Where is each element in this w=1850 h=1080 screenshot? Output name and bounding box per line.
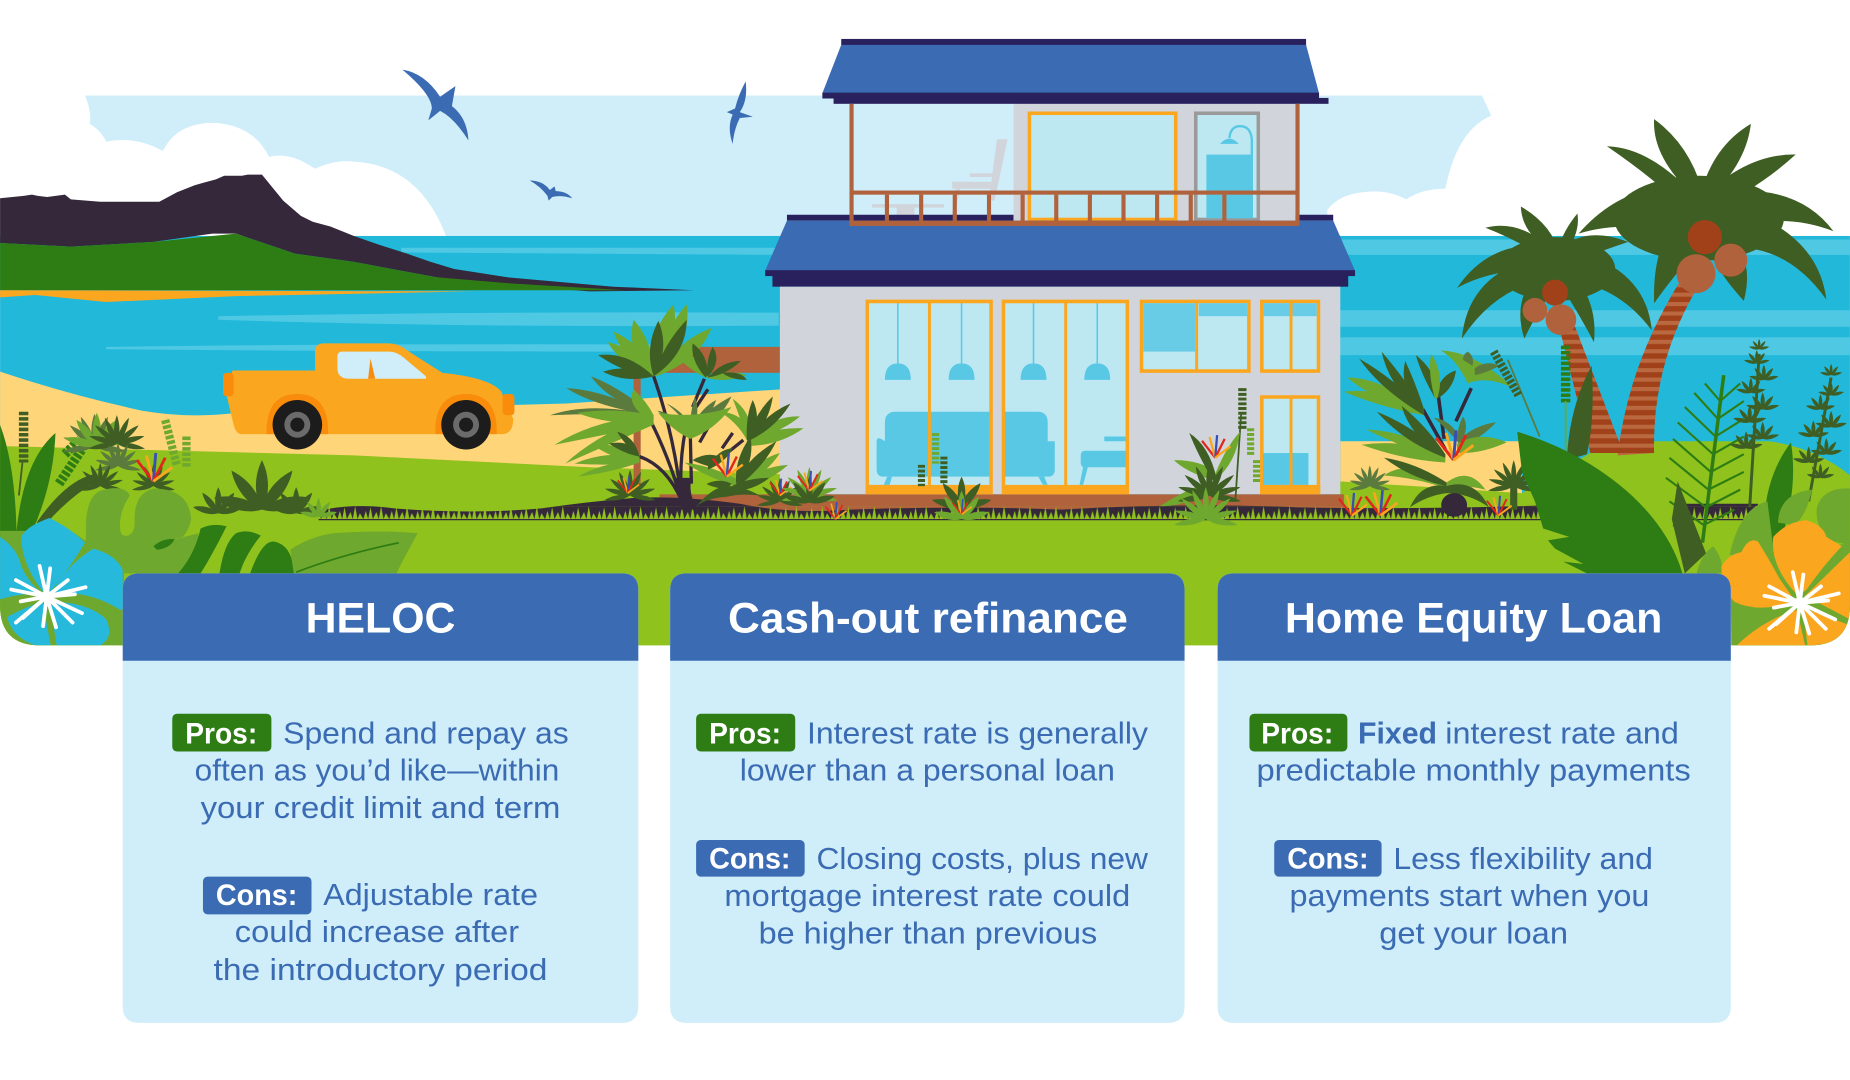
stems bbox=[1423, 388, 1471, 450]
clouds right bbox=[1327, 96, 1495, 236]
cons: Less flexibility and bbox=[1393, 842, 1653, 876]
lower left fan bbox=[1362, 429, 1445, 462]
right large fan bbox=[720, 399, 803, 446]
cons: Cons: bbox=[216, 879, 297, 912]
cons: get your loan bbox=[1379, 916, 1568, 950]
cons: Adjustable rate bbox=[323, 878, 538, 912]
stems bbox=[639, 376, 743, 505]
card: Cash-out refinance bbox=[670, 573, 1185, 1023]
beach scene illustration bbox=[0, 39, 1850, 649]
pros bbox=[172, 714, 569, 825]
balcony railing bbox=[849, 104, 1300, 226]
pros: Pros: bbox=[185, 717, 257, 750]
cons: Closing costs, plus new bbox=[816, 842, 1149, 876]
pros: your credit limit and term bbox=[201, 791, 560, 825]
card header bbox=[123, 573, 638, 661]
pros: predictable monthly payments bbox=[1257, 753, 1691, 787]
spike plants bbox=[1672, 339, 1847, 573]
ground floor wall bbox=[780, 287, 1340, 494]
pros: Interest rate is generally bbox=[807, 716, 1149, 750]
cons: be higher than previous bbox=[759, 916, 1097, 950]
striped leaf bbox=[178, 525, 294, 573]
monstera leaf bbox=[85, 488, 199, 573]
upper left fan bbox=[1344, 378, 1424, 415]
balcony chair and table bbox=[872, 139, 1008, 215]
right fan bbox=[683, 356, 747, 380]
right shrubs bbox=[1339, 346, 1566, 517]
card title: Cash-out refinance bbox=[728, 594, 1128, 641]
cons: Cons: bbox=[709, 842, 791, 875]
upper floor bbox=[1013, 104, 1297, 223]
sliding doors bbox=[866, 300, 1129, 494]
shower bbox=[1206, 126, 1253, 218]
pendant lamps bbox=[885, 301, 1110, 380]
sofa and chair bbox=[877, 412, 1128, 485]
card header bbox=[670, 573, 1185, 661]
foundation bbox=[780, 494, 1344, 511]
side windows bbox=[1141, 301, 1320, 494]
cons: payments start when you bbox=[1290, 879, 1649, 913]
shower door bbox=[1196, 113, 1258, 219]
card: Home Equity Loan bbox=[1218, 573, 1731, 1023]
birds bbox=[402, 70, 753, 201]
pros: Pros: bbox=[1261, 717, 1333, 750]
lower left fan bbox=[575, 444, 639, 477]
cons: the introductory period bbox=[214, 953, 547, 987]
house bbox=[765, 39, 1355, 511]
upper window bbox=[1029, 113, 1176, 219]
cons: mortgage interest rate could bbox=[724, 879, 1130, 913]
plants in front of house bbox=[921, 388, 1257, 528]
pros: often as you’d like—within bbox=[195, 753, 559, 787]
central plant bbox=[550, 304, 847, 519]
cons bbox=[203, 877, 547, 987]
fern right bbox=[1666, 375, 1744, 543]
sky bbox=[85, 96, 1495, 243]
pros: Spend and repay as bbox=[283, 716, 569, 750]
pros: Pros: bbox=[709, 717, 781, 750]
flower: orange hibiscus bbox=[1721, 442, 1850, 645]
top roof bbox=[822, 39, 1328, 104]
lower right fan bbox=[684, 453, 788, 486]
olive centre fan bbox=[657, 396, 732, 415]
cons: Cons: bbox=[1287, 842, 1369, 875]
pros: Fixed bbox=[1358, 716, 1437, 750]
card header bbox=[1218, 573, 1731, 661]
card title: HELOC bbox=[306, 594, 455, 641]
top fan bbox=[608, 304, 711, 376]
fan plants bbox=[59, 439, 83, 484]
cons bbox=[696, 840, 1149, 950]
bottom fan bbox=[1384, 468, 1485, 490]
light leaf bbox=[290, 532, 418, 573]
banana leaf bbox=[1517, 366, 1682, 573]
pros bbox=[696, 714, 1149, 787]
grass field bbox=[0, 441, 1850, 649]
clouds left bbox=[85, 96, 446, 236]
truck bbox=[223, 343, 514, 450]
left foliage bbox=[0, 412, 418, 573]
card: HELOC bbox=[123, 573, 638, 1023]
tall leaves bbox=[0, 425, 17, 555]
olive fan bbox=[1433, 416, 1496, 446]
pros: interest rate and bbox=[1445, 716, 1679, 750]
flower: blue hibiscus bbox=[0, 518, 124, 645]
big left frond bbox=[550, 376, 640, 416]
pros bbox=[1249, 714, 1691, 787]
dock bbox=[634, 347, 831, 511]
ocean bbox=[0, 236, 1850, 519]
mountain bbox=[0, 175, 694, 302]
card title: Home Equity Loan bbox=[1285, 594, 1662, 641]
sand bbox=[0, 372, 1522, 507]
palm trees bbox=[1457, 119, 1833, 455]
cons bbox=[1274, 840, 1653, 950]
ground strip with grass bbox=[319, 497, 1793, 520]
lower roof bbox=[765, 215, 1355, 287]
right top fan bbox=[1441, 350, 1514, 388]
cons: could increase after bbox=[235, 915, 519, 949]
pros: lower than a personal loan bbox=[740, 753, 1115, 787]
